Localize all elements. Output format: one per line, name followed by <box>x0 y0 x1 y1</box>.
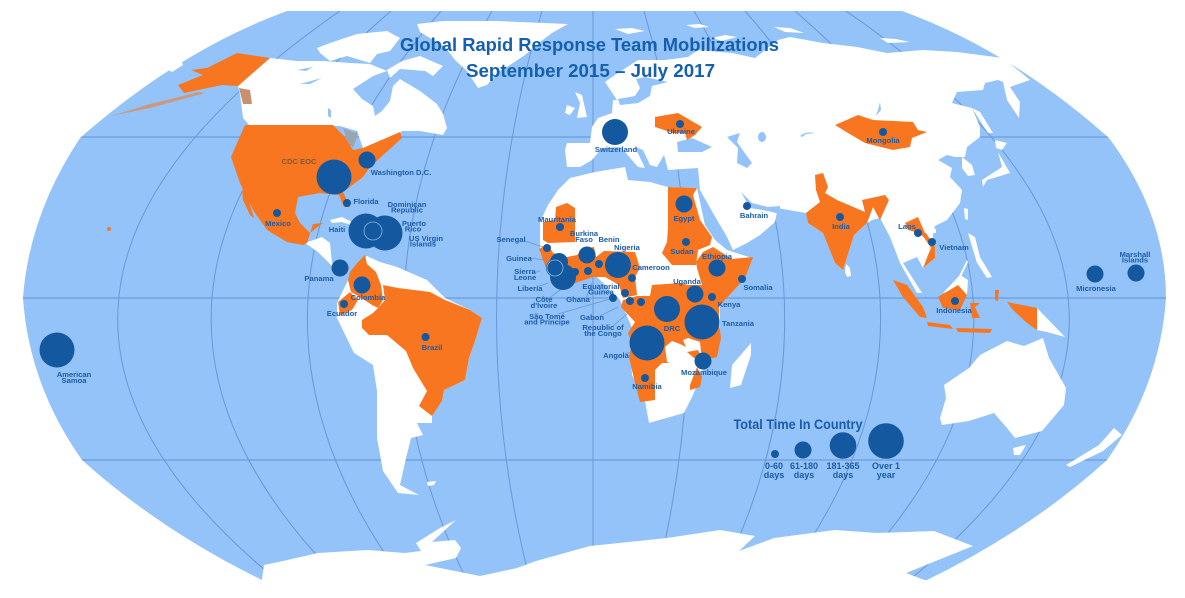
label Haiti: Haiti <box>329 225 345 234</box>
Laos <box>905 217 935 247</box>
India bubble <box>836 213 844 221</box>
Vietnam <box>921 233 935 268</box>
label Liberia: Liberia <box>518 284 543 293</box>
Panama bubble <box>332 260 348 276</box>
time-in-country bubbles <box>40 119 1144 382</box>
Alaska panhandle <box>239 88 252 104</box>
Bahrain bubble <box>743 202 751 210</box>
label American Samoa: American <box>57 370 91 379</box>
Kenya bubble <box>708 293 716 301</box>
Arctic islands of Russia <box>774 27 804 33</box>
label Dominican Republic: Republic <box>391 206 423 214</box>
Hawaii <box>107 227 111 231</box>
Senegal bubble <box>543 244 551 252</box>
Haiti bubble <box>348 214 384 248</box>
label Gabon: Gabon <box>580 313 604 322</box>
Aral Sea <box>758 132 766 142</box>
label Indonesia: Indonesia <box>936 306 972 315</box>
Sierra Leone bubble <box>546 259 564 277</box>
legend bubble over 1 year: year <box>877 470 896 480</box>
India <box>806 173 889 270</box>
Tanzania bubble <box>684 304 720 340</box>
legend bubble 0-60 days: days <box>764 470 784 480</box>
West Africa <box>539 244 640 298</box>
label Brazil: Brazil <box>422 343 442 352</box>
Palawan <box>957 260 968 281</box>
Baffin Island <box>387 56 443 78</box>
Korea <box>962 157 975 176</box>
Mauritania <box>543 203 575 243</box>
United States and Mexico <box>231 125 402 245</box>
Cameroon bubble <box>628 274 636 282</box>
Baltic Sea <box>618 77 668 105</box>
Somalia bubble <box>738 275 746 283</box>
label Marshall Islands: Marshall <box>1120 250 1150 259</box>
label Egypt: Egypt <box>673 214 695 223</box>
label Senegal: Senegal <box>496 235 526 244</box>
Burkina Faso bubble <box>578 246 596 264</box>
Arctic Canada islands <box>317 31 400 63</box>
leader lines <box>525 241 636 354</box>
label Ghana: Ghana <box>566 295 591 304</box>
Aleutian Islands <box>111 92 205 116</box>
Equatorial Guinea bubble <box>621 289 629 297</box>
Dominican Republic bubble <box>368 216 402 250</box>
Indonesia bubble <box>951 297 959 305</box>
Great Lakes <box>343 128 358 148</box>
Cuba <box>330 217 354 226</box>
Papua New Guinea <box>1037 308 1065 337</box>
Cote d'Ivoire bubble <box>571 268 579 276</box>
label Vietnam: Vietnam <box>939 243 969 252</box>
Malawi region <box>687 350 703 360</box>
legend bubble 181-365 days: days <box>833 470 853 480</box>
label Cote d'Ivoire: Côte <box>536 295 552 304</box>
Indonesia: Moluccas <box>995 290 999 301</box>
Philippines <box>968 233 992 278</box>
label Namibia: Namibia <box>632 382 663 391</box>
label Tanzania: Tanzania <box>722 319 755 328</box>
Sakhalin <box>972 108 993 133</box>
Baikal, Balkhash and Canadian lakes <box>876 102 881 116</box>
title line 2: September 2015 – July 2017 <box>466 60 715 81</box>
Vietnam bubble <box>928 238 936 246</box>
label Kenya: Kenya <box>718 300 741 309</box>
country labels <box>57 127 1150 391</box>
Uganda bubble <box>686 286 704 302</box>
Florida bubble <box>343 199 351 207</box>
label Washington D.C.: Washington D.C. <box>371 168 431 177</box>
legend bubble over 1 year: Over 1 <box>872 461 900 471</box>
legend bubble over 1 year <box>868 423 904 480</box>
Borneo north <box>943 275 968 295</box>
Chukotka tip <box>165 58 183 72</box>
label US Virgin Islands: Islands <box>410 240 436 248</box>
label Cote d'Ivoire: d'Ivoire <box>531 301 557 310</box>
white land masses <box>165 21 1122 598</box>
United Kingdom <box>575 92 587 118</box>
label Sudan: Sudan <box>670 247 694 256</box>
label Colombia: Colombia <box>351 293 386 302</box>
Central, East and Southern Africa <box>621 247 753 402</box>
label Ukraine: Ukraine <box>667 127 695 136</box>
Eurasia <box>565 37 1040 293</box>
label Sao Tome and Principe: São Tomé <box>529 312 565 321</box>
Australia <box>940 338 1066 438</box>
Guinea bubble <box>550 253 568 271</box>
Mozambique lower <box>690 367 702 390</box>
Falkland Islands <box>427 481 436 486</box>
Colombia bubble <box>354 276 370 294</box>
label Cameroon: Cameroon <box>632 263 670 272</box>
label Ecuador: Ecuador <box>327 309 357 318</box>
Indonesia: Borneo <box>938 285 967 310</box>
Colombia <box>348 255 383 308</box>
label Angola: Angola <box>603 351 630 360</box>
Gabon bubble <box>626 297 634 305</box>
title line 1: Global Rapid Response Team Mobilizations <box>400 34 779 55</box>
Mongolia <box>835 115 927 150</box>
label Guinea: Guinea <box>506 254 533 263</box>
label Bahrain: Bahrain <box>740 211 768 220</box>
legend bubble 0-60 days <box>764 450 784 480</box>
Mozambique bubble <box>694 352 712 370</box>
label Sao Tome and Principe: and Príncipe <box>524 318 570 326</box>
label Somalia: Somalia <box>743 283 773 292</box>
label Equatorial Guinea: Guinea <box>588 288 615 296</box>
Liberia bubble <box>550 264 576 290</box>
American Samoa bubble <box>40 332 74 368</box>
Tasmania <box>1013 445 1026 455</box>
label Burkina Faso: Faso <box>575 235 593 244</box>
Japan: Honshu <box>982 152 1010 187</box>
Egypt and Sudan <box>662 187 712 265</box>
Ethiopia bubble <box>708 260 726 276</box>
legend bubble 0-60 days: 0-60 <box>765 461 783 471</box>
label Burkina Faso: Burkina <box>570 229 598 238</box>
legend bubble 61-180 days <box>790 442 818 480</box>
label Sierra Leone: Sierra <box>514 267 536 276</box>
Madagascar <box>730 343 751 388</box>
Brazil <box>362 285 482 416</box>
Sao Tome bubble <box>609 294 617 302</box>
label Florida: Florida <box>353 197 379 206</box>
legend: total time in country <box>734 417 904 480</box>
Greenland <box>417 21 568 88</box>
label DRC: DRC <box>664 324 681 333</box>
label Mauritania: Mauritania <box>538 215 577 224</box>
Canada <box>238 58 447 148</box>
Ukraine bubble <box>676 120 684 128</box>
label Mongolia: Mongolia <box>866 136 900 145</box>
label Benin: Benin <box>598 235 620 244</box>
Nigeria bubble <box>605 252 631 278</box>
Persian Gulf <box>741 192 780 214</box>
Indonesia: Sumatra <box>893 280 927 318</box>
legend bubble 181-365 days: 181-365 <box>826 461 860 471</box>
Egypt bubble <box>676 196 692 212</box>
title <box>400 34 779 81</box>
label Puerto Rico: Puerto <box>402 219 426 228</box>
Mongolia bubble <box>879 128 887 136</box>
Brazil bubble <box>422 333 430 341</box>
Washington D.C. bubble <box>358 152 376 168</box>
Benin bubble <box>595 260 603 268</box>
label Mozambique: Mozambique <box>681 368 727 377</box>
label Switzerland: Switzerland <box>595 145 637 154</box>
label Micronesia: Micronesia <box>1076 284 1117 293</box>
Ireland <box>565 105 575 115</box>
South America base <box>337 256 482 495</box>
Africa base <box>540 167 752 423</box>
Sudan bubble <box>682 238 690 246</box>
overlap outline rings <box>364 222 563 276</box>
Indonesia: Papua <box>1007 302 1037 330</box>
Micronesia bubble <box>1086 266 1104 282</box>
Indonesia: Sulawesi <box>970 303 980 318</box>
Ghana bubble <box>584 267 592 275</box>
label CDC EOC: CDC EOC <box>281 157 317 166</box>
legend heading: Total Time In Country <box>734 417 863 432</box>
legend bubble 181-365 days <box>826 432 860 480</box>
label Dominican Republic: Dominican <box>388 200 426 209</box>
Republic of the Congo bubble <box>637 298 645 306</box>
label Puerto Rico: Rico <box>405 224 422 234</box>
Ecuador bubble <box>340 300 348 308</box>
Marshall Islands bubble <box>1128 264 1144 282</box>
responding countries in orange <box>107 53 1037 416</box>
New Zealand <box>1066 428 1122 467</box>
legend bubble 61-180 days: 61-180 <box>790 461 818 471</box>
inland seas and lakes <box>297 67 881 214</box>
label Sierra Leone: Leone <box>514 273 536 282</box>
Japan: Hokkaido <box>995 140 1007 150</box>
Baja California <box>242 190 254 218</box>
Antarctica <box>262 520 973 598</box>
label American Samoa: Samoa <box>62 376 87 385</box>
Ukraine <box>655 113 702 140</box>
legend bubble 61-180 days: days <box>794 470 814 480</box>
label Marshall Islands: Islands <box>1122 256 1148 264</box>
Indonesia: Java <box>927 322 953 329</box>
label Uganda: Uganda <box>673 277 702 286</box>
CDC EOC bubble <box>316 160 352 194</box>
Laos bubble <box>914 229 922 237</box>
Angola bubble <box>630 326 664 360</box>
label US Virgin Islands: US Virgin <box>409 234 443 243</box>
label Equatorial Guinea: Equatorial <box>582 282 620 291</box>
label Ethiopia: Ethiopia <box>702 252 733 261</box>
Taiwan, Hainan, Sri Lanka <box>964 208 968 220</box>
Alaska <box>178 53 270 93</box>
label Laos: Laos <box>898 222 916 231</box>
DRC bubble <box>654 296 680 322</box>
label Panama: Panama <box>304 274 334 283</box>
label Mexico: Mexico <box>265 219 291 228</box>
Caspian Sea <box>727 133 752 168</box>
Indonesia: Lesser Sunda <box>956 328 992 333</box>
Mexico bubble <box>273 209 281 217</box>
label Nigeria: Nigeria <box>614 243 641 252</box>
label Republic of the Congo: Republic of <box>582 323 624 332</box>
Ecuador <box>338 292 358 315</box>
Namibia bubble <box>641 374 649 382</box>
Central America <box>305 237 346 275</box>
Black Sea <box>677 138 712 152</box>
Mauritania bubble <box>556 223 564 231</box>
label Republic of the Congo: the Congo <box>584 329 622 338</box>
label India: India <box>832 222 851 231</box>
Switzerland bubble <box>602 119 628 145</box>
